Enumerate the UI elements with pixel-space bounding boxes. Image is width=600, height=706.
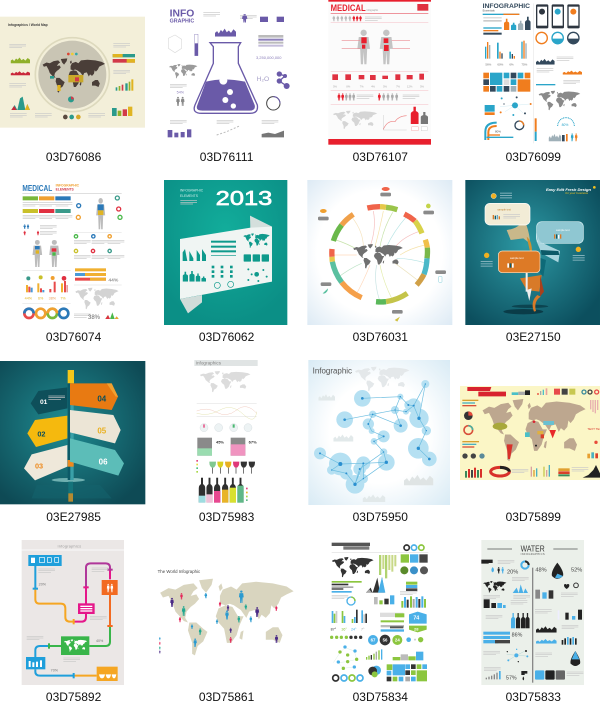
panel: thumbnail 03D76111 flask xyxy=(168,9,290,137)
label: 03D76062: 03D76062 xyxy=(199,330,255,344)
heading: medical: MEDICAL xyxy=(331,3,366,13)
heading: design tagline: Easy Edit Fresh Design xyxy=(546,187,592,192)
panel: thumbnail 03D75834 black green blue: 7° xyxy=(361,627,365,631)
label: 03D75833: 03D75833 xyxy=(506,690,561,704)
bubble: orange xyxy=(498,251,540,273)
bubbles xyxy=(314,380,437,494)
panel: thumbnail 03D76074 medical elements: 7% xyxy=(60,296,66,300)
panel: thumbnail 03D76074 medical elements: 44% xyxy=(25,296,33,300)
panel: thumbnail 03D76074 medical elements: INFOGRAPHIC xyxy=(56,184,80,188)
panel: thumbnail 03D76107 medical: 4% xyxy=(371,84,376,88)
chart: grey pink grid xyxy=(231,438,245,456)
label: 03D75899: 03D75899 xyxy=(506,510,561,524)
panel: thumbnail 03D76099 infographic essentials xyxy=(483,3,582,143)
panel: thumbnail 03D76074 medical elements: 6% xyxy=(38,296,44,300)
panel: thumbnail 03E27985 signpost xyxy=(0,361,145,504)
panel: thumbnail 03D76107 medical: 7% xyxy=(396,84,401,88)
panel: thumbnail 03E27985 signpost: 01 xyxy=(40,399,48,406)
panel: thumbnail 03D76062 teal origami 2013 xyxy=(164,180,287,325)
heading: infographics: Infographics xyxy=(196,361,222,366)
panel: thumbnail 03D75833 water: 48% xyxy=(535,568,547,574)
label: 03D75892: 03D75892 xyxy=(46,690,102,704)
panel: thumbnail 03D76099 infographic essentials: Essentials xyxy=(483,9,495,13)
panel: thumbnail 03D75834 black green blue: 87° xyxy=(331,627,337,631)
panel: thumbnail 03D76074 medical elements: 44% xyxy=(108,278,119,284)
red ribbon banner xyxy=(467,387,506,396)
box: pink xyxy=(78,603,95,614)
label: 03D75950: 03D75950 xyxy=(353,510,408,524)
network dots xyxy=(333,645,358,670)
panel: thumbnail 03D76074 medical elements xyxy=(22,183,124,321)
pipe joints xyxy=(33,569,113,678)
sign 03 xyxy=(24,445,67,480)
panel: thumbnail 03D75833 water xyxy=(481,540,584,685)
panel: thumbnail 03E27985 signpost: 03 xyxy=(35,461,43,470)
label: 03D76086: 03D76086 xyxy=(46,150,102,164)
heading: world infographic: The World Infographic xyxy=(158,569,201,574)
panel: thumbnail 03D75833 water: 20% xyxy=(507,569,518,575)
panel: thumbnail 03E27150 ribbon speech bubbles: sample text xyxy=(510,256,524,260)
panel: thumbnail 03D76074 medical elements: 38% xyxy=(49,296,57,300)
panel: thumbnail 03D76099 infographic essentials: 6% xyxy=(509,63,514,67)
panel: thumbnail 03D76031 circular world map xyxy=(307,180,452,325)
pipes xyxy=(35,563,110,676)
box: blue devices xyxy=(28,555,62,566)
panel: thumbnail 03E27985 signpost: 04 xyxy=(97,395,107,404)
panel: thumbnail 03E27150 ribbon speech bubbles: sample text xyxy=(497,208,511,212)
sign 01 xyxy=(31,387,67,414)
panel: thumbnail 03D76074 medical elements: 38% xyxy=(88,315,101,321)
panel: thumbnail 03D76074 medical elements: ELEMENTS xyxy=(56,188,75,192)
panel: thumbnail 03D76107 medical: 5% xyxy=(420,84,425,88)
heading: world map: Infographics / World Map xyxy=(8,23,48,27)
panel: thumbnail 03D76107 medical: 5% xyxy=(383,84,388,88)
label: 03D75861: 03D75861 xyxy=(199,690,255,704)
panel: thumbnail 03D76099 infographic essentials: 75% xyxy=(521,63,528,67)
box: orange bowls xyxy=(97,667,118,681)
panel: thumbnail 03D76086 world map xyxy=(0,17,145,128)
panel: thumbnail 03D75833 water: INFOGRAPHICS xyxy=(521,552,545,556)
panel: thumbnail 03D75983 wine: 45% xyxy=(216,440,224,445)
panel: thumbnail 03D76107 medical: 12% xyxy=(407,84,413,88)
label: 03E27150: 03E27150 xyxy=(506,330,561,344)
panel: thumbnail 03D75834 black green blue: 24° xyxy=(351,627,357,631)
panel: thumbnail 03D76111 flask: GRAPHIC xyxy=(170,18,194,24)
label: 03D76107: 03D76107 xyxy=(353,150,408,164)
post xyxy=(68,370,74,383)
panel: thumbnail 03D75950 network bubbles xyxy=(308,360,450,505)
heading: infographic: Infographic xyxy=(313,367,352,376)
panel: thumbnail 03D75892 pipes: 40% xyxy=(96,639,104,643)
panel: thumbnail 03D76099 infographic essentials: 80% xyxy=(495,130,501,134)
sign 04 xyxy=(70,383,118,410)
ribbon xyxy=(507,218,530,243)
panel: thumbnail 03D76107 medical xyxy=(328,0,431,145)
panel: thumbnail 03D75892 pipes xyxy=(22,540,124,685)
panel: thumbnail 03D75833 water: 57% xyxy=(506,675,517,681)
panel: thumbnail 03E27985 signpost: 02 xyxy=(37,430,45,439)
panel: thumbnail 03D75834 black green blue xyxy=(330,543,428,681)
panel: thumbnail 03D76111 flask: H₂O xyxy=(257,76,269,83)
heading: infographic: infographics xyxy=(58,545,81,549)
flask xyxy=(194,43,258,113)
panel: thumbnail 03D76107 medical: 7% xyxy=(360,84,364,88)
panel: thumbnail 03E27985 signpost: 05 xyxy=(97,426,107,435)
legend xyxy=(159,637,161,654)
label: 03E27985: 03E27985 xyxy=(46,510,101,524)
panel: thumbnail 03D75983 wine: 67% xyxy=(249,440,257,445)
panel: thumbnail 03D76062 teal origami 2013: ELEMENTS xyxy=(180,194,199,198)
sign 02 xyxy=(27,416,67,447)
ring segments xyxy=(332,207,427,302)
panel: thumbnail 03D75834 black green blue: 28 xyxy=(414,626,419,631)
panel: thumbnail 03D75834 black green blue: 67 xyxy=(371,638,376,643)
panel: thumbnail 03D75892 pipes: 70% xyxy=(51,668,59,672)
panel: thumbnail 03D75833 water: 86% xyxy=(512,632,523,638)
panel: thumbnail 03D76099 infographic essentials: 80% xyxy=(562,123,568,127)
panel: thumbnail 03D76107 medical: 5% xyxy=(333,84,338,88)
icon: cloud xyxy=(382,187,390,191)
people markers xyxy=(170,598,278,643)
box: blue chart xyxy=(26,657,45,669)
origami sheet xyxy=(250,216,272,242)
sign 05 xyxy=(70,410,121,443)
label: 03D76111: 03D76111 xyxy=(200,150,254,164)
panel: thumbnail 03D76099 infographic essentials: 60% xyxy=(497,63,504,67)
panel: thumbnail 03D75899 yellow world map xyxy=(460,386,600,480)
panel: thumbnail 03D76107 medical: Infographic xyxy=(367,9,379,12)
heading: 2013: 2013 xyxy=(216,187,272,210)
heading: water: WATER xyxy=(521,543,545,553)
icon: molecule outline xyxy=(168,35,182,53)
panel: thumbnail 03E27150 ribbon speech bubbles: sample text xyxy=(556,228,570,232)
panel: thumbnail 03D75834 black green blue: 24 xyxy=(395,638,400,643)
label: 03D75983: 03D75983 xyxy=(199,510,255,524)
chart: grey green grid xyxy=(197,438,212,456)
box: green world xyxy=(61,636,89,655)
heading: medical elements: MEDICAL xyxy=(22,183,53,193)
map highlights xyxy=(493,423,507,430)
bubble: blue xyxy=(537,222,583,243)
connector curves xyxy=(332,211,427,302)
label: 03D76099: 03D76099 xyxy=(506,150,561,164)
label: 03D76074: 03D76074 xyxy=(46,330,102,344)
sign 06 xyxy=(70,438,124,476)
panel: thumbnail 03E27985 signpost: 06 xyxy=(99,457,108,466)
panel: thumbnail 03D75892 pipes: 20% xyxy=(39,583,47,587)
panel: thumbnail 03D76099 infographic essentials: 56% xyxy=(485,63,492,67)
bubble: cream xyxy=(485,203,530,225)
heading: infographic: INFOGRAPHIC xyxy=(483,4,531,10)
panel: thumbnail 03E27150 ribbon speech bubbles: for your business xyxy=(565,191,589,195)
label: 03D75834: 03D75834 xyxy=(353,690,408,704)
panel: thumbnail 03D75834 black green blue: 74 xyxy=(413,615,419,621)
label: 03D76031: 03D76031 xyxy=(353,330,408,344)
panel: thumbnail 03D76107 medical: 8% xyxy=(346,84,351,88)
network lines xyxy=(320,384,429,484)
heading: info graphic: INFO xyxy=(170,9,194,20)
panel: thumbnail 03D76111 flask: 3,250,000,000 xyxy=(256,55,282,60)
panel: thumbnail 03D75834 black green blue: 56 xyxy=(383,638,388,643)
mosaic xyxy=(387,664,427,681)
box: orange people xyxy=(102,580,118,595)
panel: thumbnail 03D76062 teal origami 2013: INFOGRAPHIC xyxy=(180,189,204,193)
panel: thumbnail 03D75861 world infographic people xyxy=(158,569,294,655)
panel: thumbnail 03D76111 flask: 54% xyxy=(177,90,185,94)
panel: thumbnail 03E27150 ribbon speech bubbles xyxy=(465,180,600,325)
panel: thumbnail 03D75983 wine xyxy=(194,360,258,503)
panel: thumbnail 03D75833 water: 52% xyxy=(571,568,582,574)
panel: thumbnail 03D75834 black green blue: 36° xyxy=(341,627,347,631)
